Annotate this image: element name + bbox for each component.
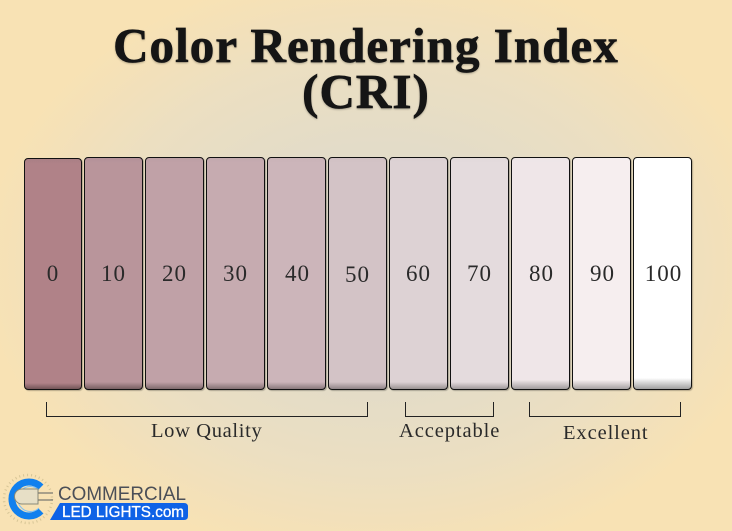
title: (CRI) — [302, 64, 430, 119]
bar 50: 50 — [345, 262, 370, 287]
bar 60: 60 — [406, 261, 431, 286]
bar 0 — [24, 158, 82, 390]
logo text: commercial: COMMERCIAL — [58, 484, 186, 505]
bracket: low quality — [46, 402, 368, 417]
bar 80: 80 — [529, 261, 554, 286]
bar 20: 20 — [162, 261, 187, 286]
logo — [2, 474, 188, 524]
bracket: acceptable — [405, 402, 494, 417]
bar 20 — [145, 157, 204, 390]
bar 10: 10 — [101, 261, 126, 286]
bar 30 — [206, 157, 265, 390]
bar 100 — [633, 157, 692, 390]
CRI scale bars — [24, 157, 694, 392]
title: Color Rendering Index — [113, 18, 619, 73]
icon: LED ring — [4, 475, 53, 523]
bar 90: 90 — [590, 261, 615, 286]
bar 0: 0 — [47, 261, 59, 286]
bar 30: 30 — [223, 261, 248, 286]
bracket: excellent — [529, 402, 681, 417]
label: acceptable: Acceptable — [399, 420, 500, 442]
label: low quality: Low Quality — [151, 420, 262, 442]
bar 60 — [389, 157, 448, 390]
bar 70: 70 — [467, 261, 492, 286]
label: excellent: Excellent — [563, 422, 649, 444]
title — [113, 18, 619, 120]
bar 50 — [328, 157, 387, 390]
bar 100: 100 — [645, 261, 682, 286]
bar 80 — [511, 157, 570, 390]
logo banner: LED LIGHTS.com: LED LIGHTS.com — [62, 504, 184, 521]
bar 90 — [572, 157, 631, 390]
bar 10 — [84, 157, 143, 390]
bar 40: 40 — [285, 261, 310, 286]
bar 40 — [267, 157, 326, 390]
bar 70 — [450, 157, 509, 390]
